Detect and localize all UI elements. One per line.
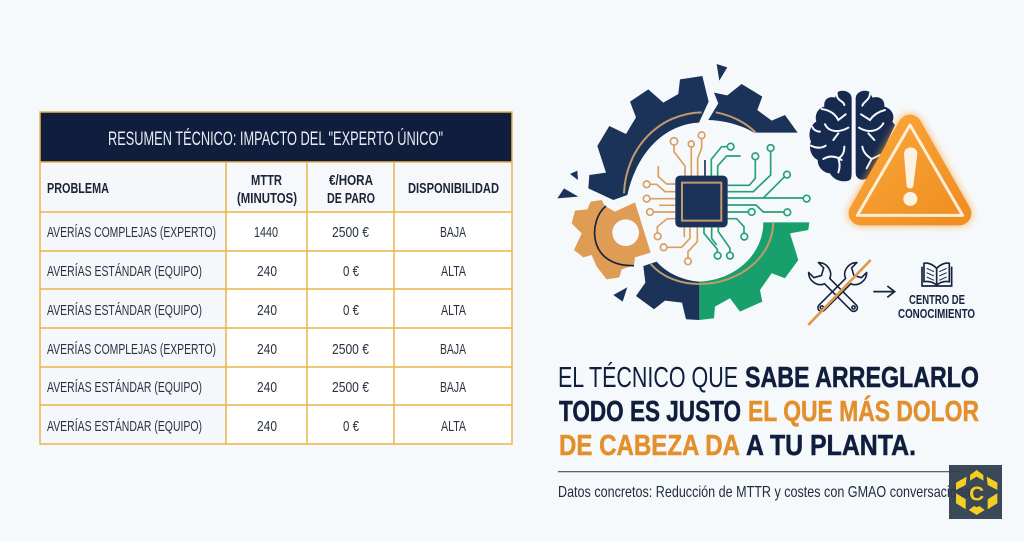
icon: broken gear with circuit chip	[557, 64, 810, 320]
table rows: 240	[257, 263, 277, 280]
icon: brain	[809, 91, 895, 181]
table title bar	[40, 112, 512, 162]
table rows: 0 €	[343, 263, 359, 280]
column headers: (MINUTOS)	[237, 191, 297, 207]
gear segment: navy bottom	[636, 262, 699, 320]
table rows: 2500 €	[332, 341, 370, 358]
table rows: 2500 €	[332, 224, 370, 241]
column headers: €/HORA	[329, 173, 373, 189]
label: knowledge centre	[898, 292, 975, 321]
table rows: AVERÍAS COMPLEJAS (EXPERTO)	[47, 224, 216, 241]
table rows: ALTA	[441, 302, 466, 319]
table rows: AVERÍAS ESTÁNDAR (EQUIPO)	[47, 263, 202, 280]
logo badge: C	[969, 483, 984, 506]
gear segment: green lower right	[699, 222, 809, 320]
gear shards	[557, 64, 727, 302]
table rows: AVERÍAS COMPLEJAS (EXPERTO)	[47, 341, 216, 358]
headline	[558, 361, 979, 462]
table rows	[47, 224, 466, 435]
circuit traces: orange	[643, 132, 705, 265]
headline: A TU PLANTA.	[746, 430, 916, 462]
gear segment: navy upper right	[708, 84, 798, 133]
table rows: BAJA	[440, 341, 466, 358]
table rows: BAJA	[440, 224, 466, 241]
headline: DE CABEZA DA	[559, 430, 740, 462]
column headers: MTTR	[251, 173, 282, 189]
headline: EL TÉCNICO QUE	[558, 361, 738, 394]
gear ring	[624, 112, 773, 284]
icon: open book	[922, 263, 952, 286]
table rows: ALTA	[441, 418, 466, 435]
table rows: 2500 €	[332, 379, 370, 396]
table rows: 240	[257, 418, 277, 435]
gear fragment: orange	[572, 200, 651, 279]
column headers: PROBLEMA	[47, 181, 109, 197]
table title bar: RESUMEN TÉCNICO: IMPACTO DEL "EXPERTO ÚNICO"	[108, 128, 443, 150]
table rows: 240	[257, 379, 277, 396]
column headers: DISPONIBILIDAD	[408, 181, 499, 197]
table rows: 240	[257, 341, 277, 358]
logo badge	[949, 465, 1002, 519]
gear segment: navy upper left	[588, 76, 709, 200]
icon: warning triangle	[857, 125, 963, 215]
table rows: 0 €	[343, 302, 359, 319]
table rows: 240	[257, 302, 277, 319]
table rows: 1440	[254, 224, 278, 241]
icon: crossed wrenches	[806, 260, 871, 325]
headline: TODO ES JUSTO	[559, 396, 741, 428]
arrow	[873, 286, 895, 297]
circuit traces: green	[704, 143, 810, 259]
label: knowledge centre: CONOCIMIENTO	[898, 306, 975, 321]
column headers: DE PARO	[327, 191, 375, 207]
table rows: ALTA	[441, 263, 466, 280]
table rows: BAJA	[440, 379, 466, 396]
microchip	[675, 176, 728, 227]
table rows: AVERÍAS ESTÁNDAR (EQUIPO)	[47, 418, 202, 435]
label: knowledge centre: CENTRO DE	[909, 292, 965, 307]
table rows: AVERÍAS ESTÁNDAR (EQUIPO)	[47, 302, 202, 319]
table rows: AVERÍAS ESTÁNDAR (EQUIPO)	[47, 379, 202, 396]
column headers	[47, 173, 499, 207]
panel: summary table	[40, 112, 512, 444]
table rows: 0 €	[343, 418, 359, 435]
